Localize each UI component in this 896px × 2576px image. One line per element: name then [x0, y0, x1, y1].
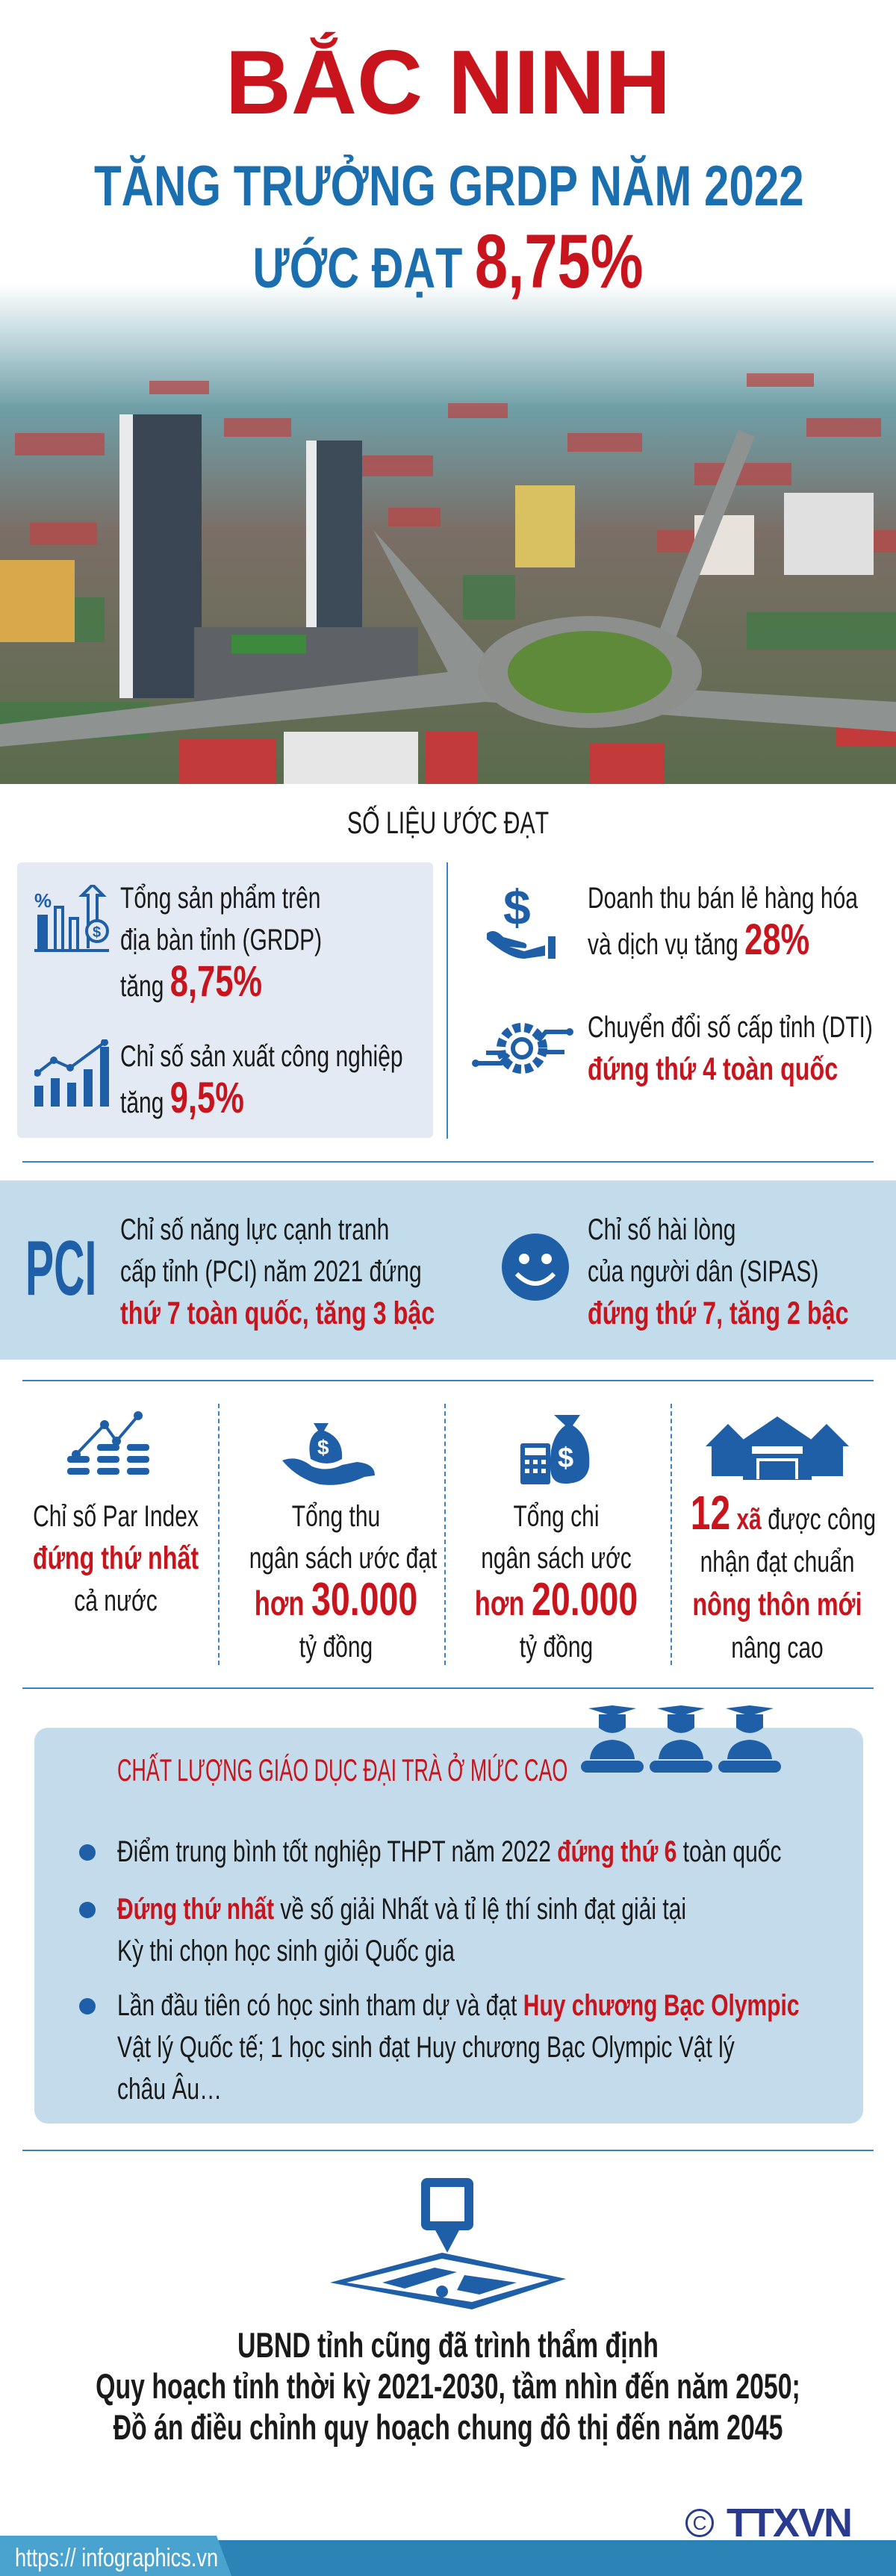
panel: education	[34, 1728, 863, 2124]
logo: TTXVN: C	[693, 2512, 706, 2534]
text: PCI: Chỉ số năng lực cạnh tranh	[120, 1213, 389, 1246]
text: retail: và dịch vụ tăng 28%	[588, 915, 809, 964]
bullet 3	[79, 1998, 96, 2015]
text: new rural: nhận đạt chuẩn	[700, 1546, 854, 1578]
text: expenditure: hơn 20.000	[475, 1574, 638, 1625]
icon: money hand: $	[503, 881, 531, 935]
panel: education: Kỳ thi chọn học sinh giỏi Quốc gia	[117, 1935, 455, 1967]
heading: education: CHẤT LƯỢNG GIÁO DỤC ĐẠI TRÀ Ở MỨC CAO	[117, 1752, 567, 1788]
logo: TTXVN: TTXVN	[727, 2501, 851, 2545]
text: GRDP: tăng 8,75%	[120, 957, 262, 1006]
text: expenditure: ngân sách ước	[481, 1542, 632, 1575]
icon: growth chart: $	[93, 924, 101, 941]
text: DTI: đứng thứ 4 toàn quốc	[588, 1051, 838, 1087]
text: GRDP: địa bàn tỉnh (GRDP)	[120, 924, 322, 956]
icon: houses	[706, 1416, 849, 1480]
text: PCI: cấp tỉnh (PCI) năm 2021 đứng	[120, 1255, 422, 1288]
text: conclusion: Đồ án điều chỉnh quy hoạch chung đô thị đến năm 2045	[113, 2407, 783, 2447]
footer	[0, 2540, 896, 2576]
text: revenue: hơn 30.000	[255, 1574, 417, 1625]
text: industrial production: Chỉ số sản xuất công nghiệp	[120, 1040, 403, 1073]
panel: four stats	[33, 1404, 876, 1665]
text: retail	[588, 882, 858, 964]
logo: TTXVN	[685, 2501, 874, 2551]
text: conclusion: Quy hoạch tỉnh thời kỳ 2021-2030, tầm nhìn đến năm 2050;	[96, 2366, 800, 2406]
title: BẮC NINH	[225, 31, 671, 133]
icon: map pin	[330, 2178, 566, 2309]
text: expenditure: tỷ đồng	[520, 1631, 593, 1664]
text: expenditure: Tổng chi	[513, 1500, 600, 1533]
text: PCI: thứ 7 toàn quốc, tăng 3 bậc	[120, 1295, 435, 1331]
text: revenue: Tổng thu	[292, 1500, 380, 1533]
icon: calculator money: $	[558, 1443, 573, 1474]
text: par index	[33, 1500, 199, 1617]
panel: PCI & SIPAS band	[0, 1180, 896, 1360]
text: industrial production: tăng 9,5%	[120, 1074, 244, 1122]
photo: city aerial	[0, 291, 896, 784]
icon: PCI: PCI	[25, 1225, 96, 1312]
text: par index: đứng thứ nhất	[33, 1540, 199, 1576]
subtitle: ước đạt: ƯỚC ĐẠT 8,75%	[253, 219, 643, 304]
panel: education: Đứng thứ nhất về số giải Nhất và tỉ lệ thí sinh đạt giải tại	[117, 1893, 686, 1926]
panel: left stats	[17, 862, 433, 1138]
text: revenue: ngân sách ước đạt	[249, 1542, 437, 1575]
icon: industry chart	[34, 1039, 109, 1107]
text: expenditure	[475, 1500, 638, 1664]
heading: số liệu ước đạt: SỐ LIỆU ƯỚC ĐẠT	[347, 805, 549, 840]
icon: money bag hand	[282, 1423, 375, 1485]
text: DTI: Chuyển đổi số cấp tỉnh (DTI)	[588, 1011, 873, 1044]
bullet 2	[79, 1902, 96, 1918]
icon: money bag hand: $	[317, 1436, 329, 1459]
text: conclusion	[96, 2325, 800, 2447]
text: SIPAS: đứng thứ 7, tăng 2 bậc	[588, 1295, 849, 1331]
panel: education: châu Âu…	[117, 2073, 222, 2106]
icon: smiley	[502, 1233, 569, 1301]
text: SIPAS: của người dân (SIPAS)	[588, 1255, 818, 1288]
icon: growth chart	[34, 885, 109, 952]
text: SIPAS	[588, 1213, 849, 1331]
text: par index: Chỉ số Par Index	[33, 1500, 199, 1533]
bullet 1	[79, 1844, 96, 1861]
text: new rural: nâng cao	[731, 1631, 824, 1664]
icon: graduates	[581, 1705, 781, 1773]
text: par index: cả nước	[74, 1584, 158, 1617]
panel: education: Lần đầu tiên có học sinh tham dự và đạt Huy chương Bạc Olympic	[117, 1989, 800, 2022]
text: SIPAS: Chỉ số hài lòng	[588, 1213, 735, 1246]
text: GRDP: Tổng sản phẩm trên	[120, 882, 321, 915]
text: revenue	[249, 1500, 438, 1664]
text: PCI	[120, 1213, 435, 1331]
text: DTI	[588, 1011, 873, 1087]
text: industrial production	[120, 1040, 403, 1122]
icon: growth chart: %	[34, 889, 52, 912]
icon: money hand	[487, 881, 556, 959]
logo: TTXVN: Vietnam News Agency	[779, 2540, 874, 2551]
text: new rural: 12 xã được công	[691, 1486, 876, 1540]
icon: calculator money	[520, 1415, 590, 1484]
icon: digital gear	[472, 1023, 573, 1074]
icon: par index	[67, 1411, 149, 1475]
text: new rural: nông thôn mới	[692, 1587, 862, 1623]
text: retail: Doanh thu bán lẻ hàng hóa	[588, 882, 858, 915]
text: new rural	[691, 1486, 876, 1664]
text: conclusion: UBND tỉnh cũng đã trình thẩm định	[237, 2325, 659, 2365]
text: revenue: tỷ đồng	[299, 1631, 373, 1664]
panel: education: Điểm trung bình tốt nghiệp THPT năm 2022 đứng thứ 6 toàn quốc	[117, 1835, 781, 1868]
subtitle: TĂNG TRƯỞNG GRDP NĂM 2022	[94, 155, 804, 218]
footer: https:// infographics.vn	[15, 2544, 218, 2572]
text: GRDP	[120, 882, 322, 1006]
panel: education: Vật lý Quốc tế; 1 học sinh đạt Huy chương Bạc Olympic Vật lý	[117, 2031, 735, 2064]
